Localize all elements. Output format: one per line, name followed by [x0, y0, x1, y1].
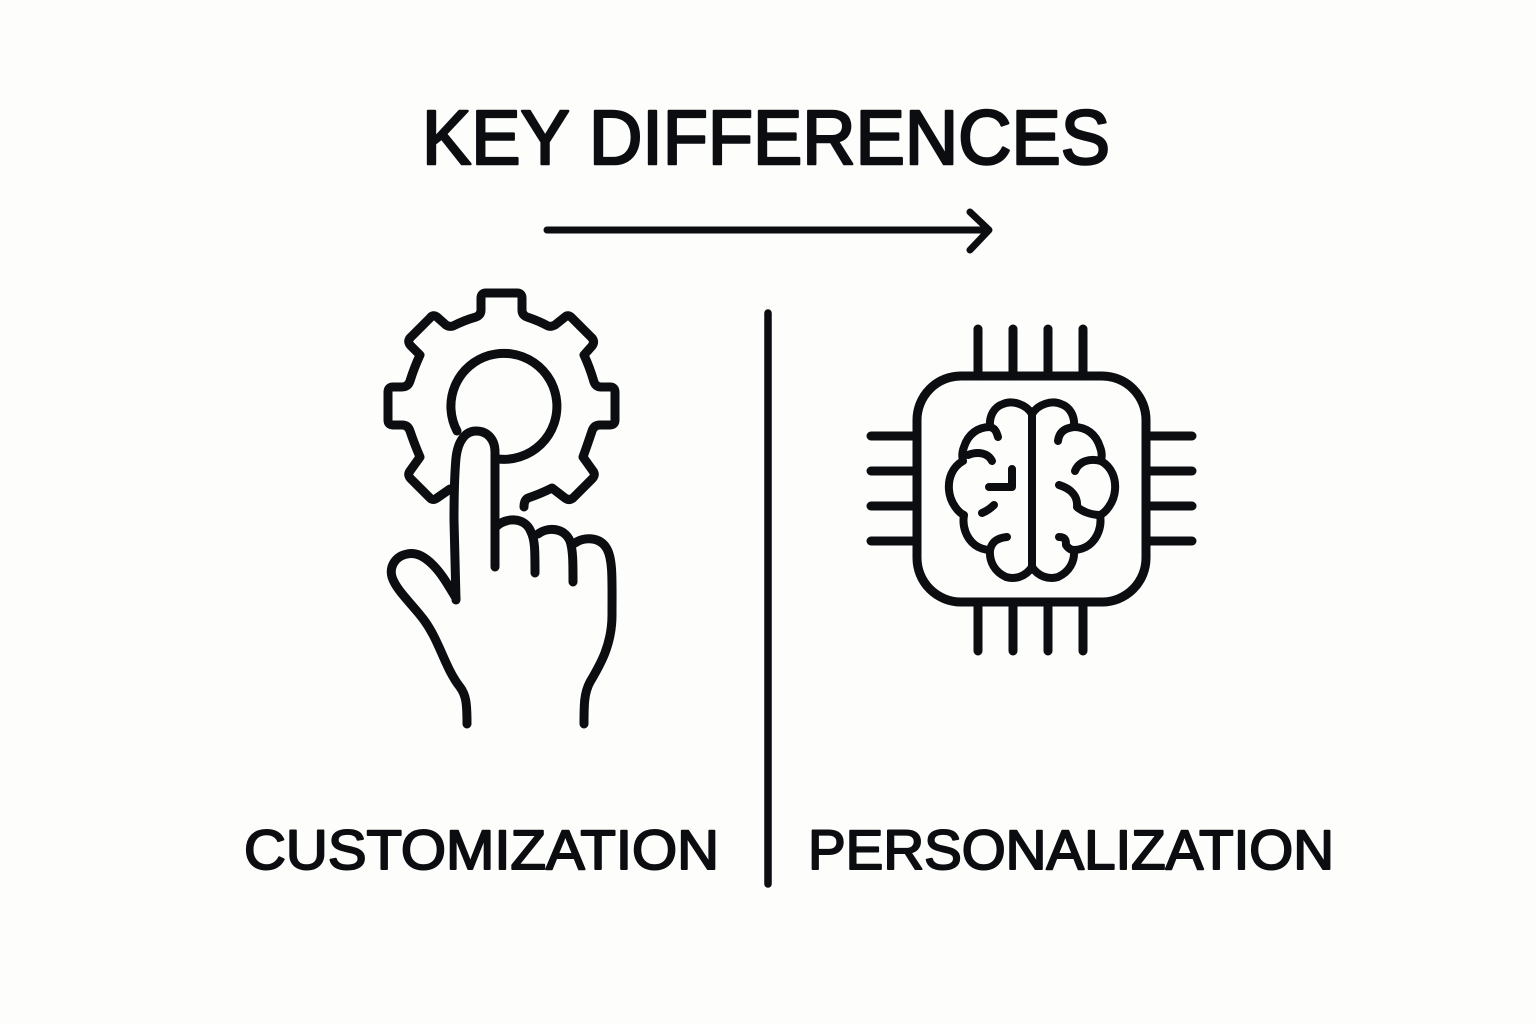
title: KEY DIFFERENCES [422, 95, 1110, 181]
ring finger [538, 529, 573, 582]
brain [949, 402, 1115, 578]
chip pins [871, 329, 1192, 651]
label: customization: CUSTOMIZATION [244, 818, 719, 881]
little finger and palm edge [575, 539, 612, 724]
icon: gear with pointing hand [388, 293, 615, 724]
middle finger [497, 520, 535, 573]
label: personalization: PERSONALIZATION [808, 818, 1334, 881]
thumb and palm edge [391, 553, 467, 724]
arrow [547, 212, 989, 250]
hand outline [454, 431, 495, 600]
gear outline [388, 293, 615, 507]
gear centre circle [451, 353, 557, 459]
chip body [917, 376, 1146, 602]
divider [764, 313, 772, 884]
icon: brain on circuit chip [871, 329, 1192, 651]
